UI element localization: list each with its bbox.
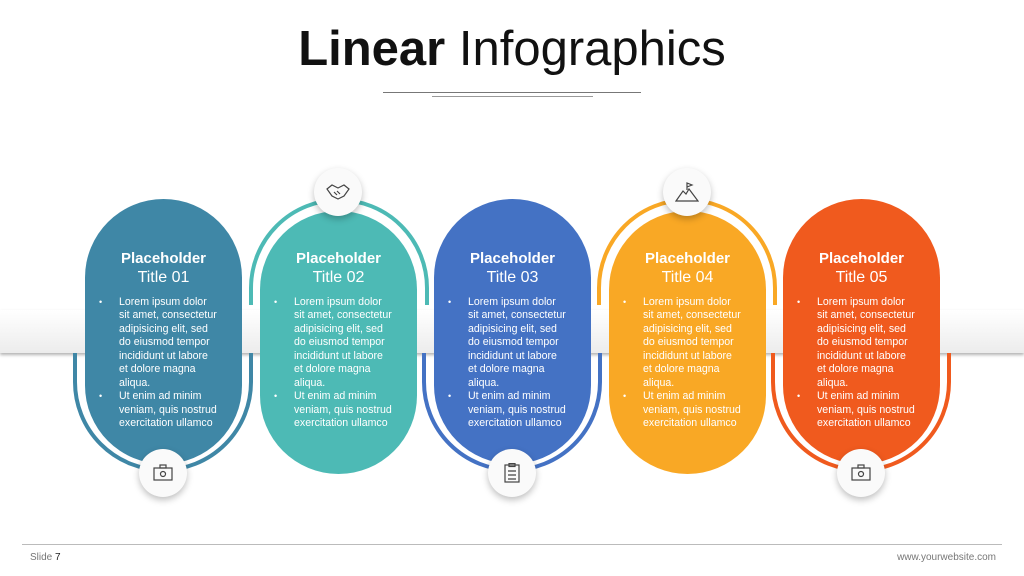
icon: mountain flag — [663, 168, 711, 216]
panel: step 4 — [609, 211, 766, 474]
title underline — [383, 92, 641, 93]
panel: step 5: Placeholder — [819, 250, 904, 267]
panel: step 1: adipisicing elit, sed — [119, 323, 208, 335]
panel: step 5: incididunt ut labore — [817, 350, 906, 362]
panel: step 4: adipisicing elit, sed — [643, 323, 732, 335]
panel: step 1: sit amet, consectetur — [119, 309, 217, 321]
panel: step 3: do eiusmod tempor — [468, 336, 559, 348]
panel: step 3: exercitation ullamco — [468, 417, 562, 429]
panel: step 5 — [783, 199, 940, 464]
panel: step 2: sit amet, consectetur — [294, 309, 392, 321]
panel: step 5: exercitation ullamco — [817, 417, 911, 429]
panel: step 3: Ut enim ad minim — [468, 390, 550, 402]
panel: step 5: Lorem ipsum dolor — [817, 296, 905, 308]
panel: step 5: sit amet, consectetur — [817, 309, 915, 321]
panel: step 4: do eiusmod tempor — [643, 336, 734, 348]
panel: step 5: veniam, quis nostrud — [817, 404, 915, 416]
panel: step 3: veniam, quis nostrud — [468, 404, 566, 416]
panel: step 2: veniam, quis nostrud — [294, 404, 392, 416]
panel: step 2: Lorem ipsum dolor — [294, 296, 382, 308]
panel: step 2: Ut enim ad minim — [294, 390, 376, 402]
panel: step 4: et dolore magna — [643, 363, 720, 375]
panel: step 1: do eiusmod tempor — [119, 336, 210, 348]
panel: step 1: Ut enim ad minim — [119, 390, 201, 402]
panel: step 4: Placeholder — [645, 250, 730, 267]
arc: 4 top — [597, 200, 777, 305]
panel: step 2: Title 02 — [313, 269, 364, 286]
arc: 2 top — [249, 200, 429, 305]
panel: step 1 — [85, 199, 242, 464]
panel: step 4: sit amet, consectetur — [643, 309, 741, 321]
arc: 5 bottom — [771, 353, 951, 469]
footer line — [22, 544, 1002, 545]
panel: step 2: aliqua. — [294, 377, 325, 389]
icon: briefcase 1 — [139, 449, 187, 497]
arc: 1 bottom — [73, 353, 253, 469]
panel: step 2: et dolore magna — [294, 363, 371, 375]
footer: slide number: Slide 7 — [30, 552, 61, 563]
icon: briefcase 5 — [837, 449, 885, 497]
panel: step 4: exercitation ullamco — [643, 417, 737, 429]
panel: step 2: Placeholder — [296, 250, 381, 267]
panel: step 4: aliqua. — [643, 377, 674, 389]
panel: step 1: Placeholder — [121, 250, 206, 267]
panel: step 5: adipisicing elit, sed — [817, 323, 906, 335]
panel: step 1: aliqua. — [119, 377, 150, 389]
panel: step 2: incididunt ut labore — [294, 350, 383, 362]
icon: checklist — [488, 449, 536, 497]
title: Linear Infographics — [298, 22, 726, 76]
panel: step 1: Title 01 — [138, 269, 189, 286]
icon: handshake — [314, 168, 362, 216]
arc: 3 bottom — [422, 353, 602, 469]
panel: step 1: incididunt ut labore — [119, 350, 208, 362]
panel: step 2: adipisicing elit, sed — [294, 323, 383, 335]
panel: step 2 — [260, 211, 417, 474]
panel: step 1: exercitation ullamco — [119, 417, 213, 429]
footer: website: www.yourwebsite.com — [897, 552, 996, 563]
panel: step 5: Title 05 — [836, 269, 887, 286]
panel: step 5: aliqua. — [817, 377, 848, 389]
panel: step 3: Lorem ipsum dolor — [468, 296, 556, 308]
panel: step 4: Title 04 — [662, 269, 713, 286]
panel: step 4: incididunt ut labore — [643, 350, 732, 362]
panel: step 2: exercitation ullamco — [294, 417, 388, 429]
panel: step 3: adipisicing elit, sed — [468, 323, 557, 335]
panel: step 3: aliqua. — [468, 377, 499, 389]
panel: step 3: sit amet, consectetur — [468, 309, 566, 321]
panel: step 1: Lorem ipsum dolor — [119, 296, 207, 308]
panel: step 3: Placeholder — [470, 250, 555, 267]
panel: step 1: et dolore magna — [119, 363, 196, 375]
panel: step 1: veniam, quis nostrud — [119, 404, 217, 416]
panel: step 3: Title 03 — [487, 269, 538, 286]
panel: step 4: Lorem ipsum dolor — [643, 296, 731, 308]
panel: step 5: do eiusmod tempor — [817, 336, 908, 348]
panel: step 5: Ut enim ad minim — [817, 390, 899, 402]
panel: step 4: Ut enim ad minim — [643, 390, 725, 402]
panel: step 3: incididunt ut labore — [468, 350, 557, 362]
gray band — [0, 310, 1024, 353]
panel: step 3: et dolore magna — [468, 363, 545, 375]
panel: step 3 — [434, 199, 591, 464]
panel: step 5: et dolore magna — [817, 363, 894, 375]
panel: step 4: veniam, quis nostrud — [643, 404, 741, 416]
panel: step 2: do eiusmod tempor — [294, 336, 385, 348]
